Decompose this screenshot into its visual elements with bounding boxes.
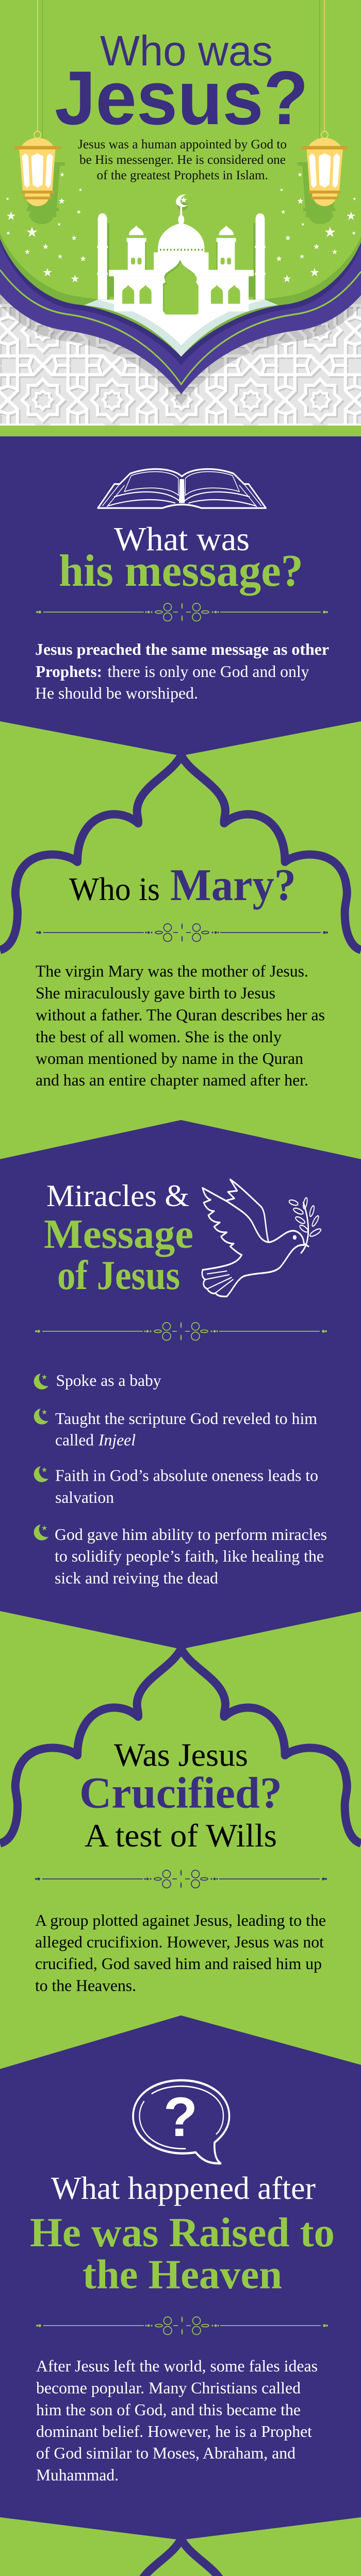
intro text: [78, 138, 287, 182]
after text: him the son of God, and this became the: [36, 2400, 301, 2419]
ogee frame: [0, 2539, 361, 2576]
bullet: ability to perform miracles: [34, 1524, 327, 1587]
after text: Muhammad.: [36, 2466, 119, 2484]
mary text: the best of all women. She is the only: [36, 1027, 282, 1046]
divider: [36, 603, 328, 621]
mary text: [36, 961, 325, 1089]
stars left: [6, 172, 86, 282]
crucifixion text: A group plotted againet Jesus, leading to the: [35, 1911, 326, 1929]
after text: [36, 2357, 318, 2484]
heading: was jesus crucified: Crucified?: [79, 1768, 282, 1818]
icon: question speech bubble: [133, 2080, 229, 2163]
crucifixion text: [35, 1911, 326, 1995]
bullet: spoke as a baby: Spoke as a baby: [56, 1371, 161, 1389]
heading: what happened after he was raised: He was Raised to: [30, 2209, 335, 2256]
icon: question speech bubble: ?: [163, 2086, 198, 2148]
intro text: of the greatest Prophets in Islam.: [97, 168, 268, 182]
heading: what happened after he was raised: [30, 2171, 335, 2298]
heading: was jesus crucified: A test of Wills: [85, 1817, 277, 1854]
panel: what was his message: [0, 436, 361, 756]
panel: will jesus return: [0, 2517, 361, 2576]
crucifixion text: alleged crucifixion. However, Jesus was not: [35, 1933, 324, 1951]
heading: miracles and message of jesus: Message: [44, 1212, 193, 1257]
mary text: woman mentioned by name in the Quran: [36, 1049, 303, 1067]
panel: who is mary: [0, 721, 361, 1159]
mary text: She miraculously gave birth to Jesus: [36, 984, 275, 1002]
bullet: faith in oneness: Faith in God’s absolute oneness leads to: [55, 1466, 318, 1485]
message text: there is only one God and only: [107, 662, 309, 681]
heading: who is mary: [69, 860, 296, 910]
heading: what happened after he was raised: What happened after: [51, 2171, 316, 2206]
icon: white mosque: [97, 194, 266, 314]
heading: miracles and message of jesus: of Jesus: [57, 1253, 180, 1298]
heading: who is mary: Who is: [69, 871, 160, 907]
after text: dominant belief. However, he is a Prophet: [36, 2422, 312, 2441]
heading: was jesus crucified: [79, 1737, 282, 1854]
green band: [0, 426, 361, 436]
icon: dove with olive branch: [202, 1179, 322, 1297]
title: Jesus?: [55, 56, 308, 141]
divider: [35, 1322, 327, 1341]
heading: what happened after he was raised: the Heaven: [83, 2251, 282, 2298]
divider: [35, 1870, 327, 1888]
panel: was jesus crucified: [0, 1611, 361, 2069]
bullet: taught the scripture: Injeel: [98, 1430, 136, 1449]
after text: After Jesus left the world, some fales ideas: [36, 2357, 318, 2375]
bullet: faith in oneness: [34, 1466, 318, 1506]
ogee frame: [0, 755, 361, 950]
bullet: ability to perform miracles: God gave him ability to perform miracles: [55, 1525, 327, 1544]
heading: who is mary: Mary?: [170, 860, 296, 910]
bullet: taught the scripture: [34, 1409, 317, 1449]
message text: [35, 640, 329, 702]
ogee frame: [0, 1649, 361, 1843]
after text: become popular. Many Christians called: [36, 2379, 301, 2397]
message text: Jesus preached the same message as other: [35, 640, 329, 658]
bullet: taught the scripture: Taught the scripture God reveled to him: [55, 1409, 317, 1428]
mary text: and has an entire chapter named after her.: [36, 1071, 308, 1089]
bullet: ability to perform miracles: sick and reiving the dead: [55, 1569, 218, 1587]
panel: header: [0, 0, 361, 436]
heading: was jesus crucified: Was Jesus: [114, 1737, 248, 1773]
intro text: Jesus was a human appointed by God to: [78, 138, 287, 151]
icon: open book: [98, 469, 266, 508]
heading: what was his message: [59, 520, 303, 596]
crucifixion text: crucified, God saved him and raised him up: [35, 1954, 322, 1973]
ogee banner layers: [0, 0, 361, 405]
stars right: [276, 172, 356, 282]
message text: Prophets:: [36, 662, 102, 681]
after text: of God similar to Moses, Abraham, and: [36, 2444, 296, 2462]
geometric pattern band: [0, 289, 361, 426]
bullet: taught the scripture: called: [55, 1430, 94, 1449]
heading: miracles and message of jesus: [44, 1179, 193, 1298]
divider: [36, 2316, 328, 2335]
heading: miracles and message of jesus: Miracles &: [46, 1179, 189, 1213]
heading: what was his message: his message?: [59, 546, 303, 596]
bullet: faith in oneness: salvation: [55, 1488, 114, 1506]
bullet: ability to perform miracles: to solidify people’s faith, like healing the: [55, 1547, 324, 1565]
heading: what was his message: What was: [114, 520, 250, 558]
mary text: The virgin Mary was the mother of Jesus.: [36, 961, 308, 980]
icon: lantern left: [14, 0, 65, 224]
panel: what happened after: [0, 2015, 361, 2540]
divider: [36, 923, 328, 942]
intro text: be His messenger. He is considered one: [79, 153, 286, 167]
icon: lantern right: [297, 0, 348, 224]
message text: He should be worshiped.: [35, 684, 198, 702]
title: Who was: [100, 27, 273, 75]
mary text: without a father. The Quran describes her as: [36, 1006, 325, 1024]
panel: miracles and message: [0, 1120, 361, 1649]
crucifixion text: to the Heavens.: [35, 1976, 136, 1995]
